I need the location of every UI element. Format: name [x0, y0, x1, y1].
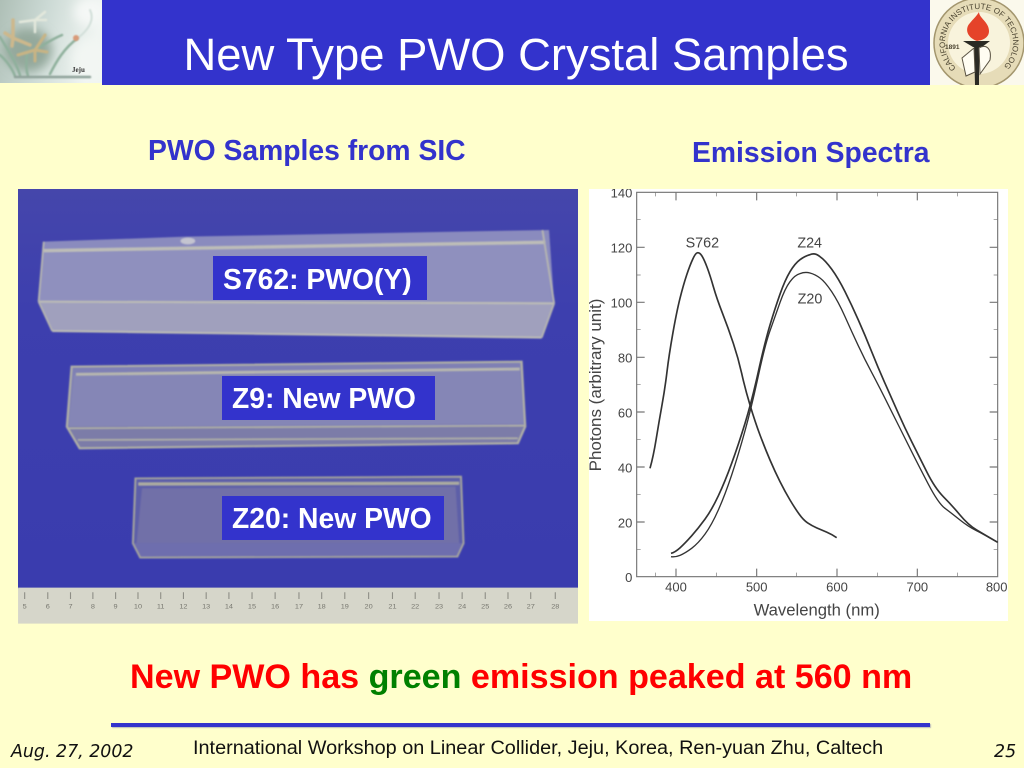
ruler numbers: 15 [248, 604, 256, 610]
heading: PWO samples: PWO Samples from SIC [148, 134, 466, 166]
ruler numbers: 17 [295, 604, 303, 610]
curve labels [686, 236, 822, 307]
curve labels: Z20 [798, 291, 822, 307]
ruler numbers: 16 [271, 604, 279, 610]
ruler numbers: 10 [134, 604, 142, 610]
ruler numbers: 5 [23, 604, 27, 610]
ruler numbers: 22 [411, 604, 419, 610]
ruler numbers: 14 [225, 604, 233, 610]
label: S762: S762: PWO(Y) [223, 263, 412, 295]
ruler numbers: 8 [91, 604, 95, 610]
label: Z20: Z20: New PWO [232, 502, 432, 534]
heading: emission spectra: Emission Spectra [692, 136, 929, 168]
ruler numbers: 27 [527, 604, 535, 610]
title bar [102, 0, 930, 85]
icon: Caltech seal [930, 0, 1024, 85]
crystal S762 [39, 230, 554, 338]
y axis numbers [611, 186, 632, 585]
label: Z9 [222, 376, 435, 420]
title: New Type PWO Crystal Samples [183, 29, 849, 80]
y axis numbers: 80 [618, 351, 632, 366]
footer citation: International Workshop on Linear Collider, Jeju, Korea, Ren-yuan Zhu, Caltech [193, 737, 883, 759]
y axis numbers: 60 [618, 405, 632, 420]
ruler numbers: 26 [504, 604, 512, 610]
ruler numbers: 18 [318, 604, 326, 610]
ruler numbers: 9 [114, 604, 118, 610]
x axis title: Wavelength (nm) [754, 600, 880, 619]
crystal Z9 [67, 362, 525, 448]
ruler numbers: 12 [179, 604, 188, 610]
ruler numbers: 23 [435, 604, 443, 610]
y axis numbers: 0 [625, 570, 632, 585]
x axis numbers: 600 [826, 579, 848, 594]
page number: 25 [994, 742, 1016, 762]
curve S762 [650, 253, 837, 538]
label: S762 [213, 256, 427, 300]
conclusion statement: New PWO has green emission peaked at 560 nm [130, 658, 912, 696]
y axis numbers: 100 [611, 296, 632, 311]
icon: Jeju orchid logo [0, 0, 102, 83]
curve Z24 [671, 254, 998, 553]
ruler numbers: 13 [202, 604, 210, 610]
flame [967, 12, 989, 41]
x axis numbers: 700 [906, 579, 928, 594]
label: Z20 [222, 496, 444, 540]
ruler numbers: 7 [68, 604, 73, 610]
plot frame and ticks [637, 192, 998, 577]
curve labels: Z24 [797, 236, 822, 252]
ruler numbers: 21 [388, 604, 397, 610]
ruler numbers: 20 [365, 604, 373, 610]
torch and hand [974, 46, 979, 85]
ruler [18, 588, 579, 624]
crystal Z20 [133, 477, 464, 558]
y axis numbers: 120 [611, 241, 632, 256]
footer date: Aug. 27, 2002 [11, 742, 133, 762]
x axis numbers: 800 [986, 579, 1007, 594]
y axis numbers: 20 [618, 515, 632, 530]
x axis numbers: 400 [665, 579, 687, 594]
curve Z20 [671, 272, 998, 557]
ruler numbers: 25 [481, 604, 489, 610]
footer rule [111, 723, 930, 727]
Jeju logo text: Jeju [72, 66, 85, 74]
ruler numbers: 28 [551, 604, 559, 610]
ruler numbers: 24 [458, 604, 466, 610]
seal year: 1891 [945, 44, 960, 51]
emission spectra chart [589, 189, 1008, 621]
label: Z9: Z9: New PWO [232, 382, 416, 414]
x axis numbers: 500 [746, 579, 768, 594]
curve labels: S762 [686, 236, 719, 252]
ruler numbers: 19 [341, 604, 349, 610]
x axis numbers [665, 579, 1007, 594]
photo panel: crystal samples [18, 189, 578, 624]
ruler numbers: 11 [157, 604, 165, 610]
ruler numbers: 6 [46, 604, 50, 610]
y axis numbers: 40 [618, 460, 632, 475]
